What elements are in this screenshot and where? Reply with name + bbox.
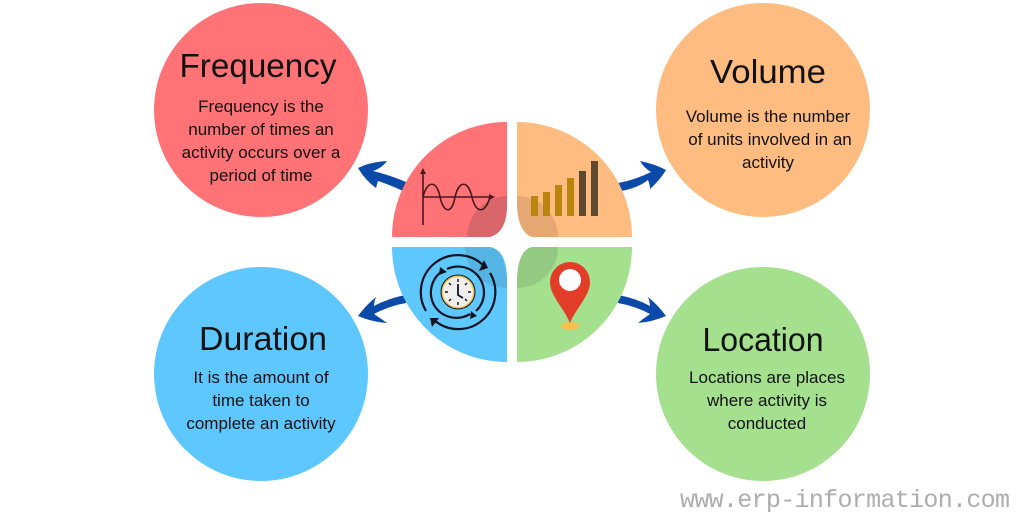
text: duration description: complete an activity — [186, 414, 336, 433]
panel: duration circle — [154, 267, 368, 481]
text: frequency description: period of time — [210, 166, 312, 185]
text: duration description — [186, 368, 336, 433]
text: volume description: of units involved in an — [688, 130, 852, 149]
panel: orange quarter with bars icon — [517, 122, 632, 237]
arrow: to volume — [618, 161, 666, 191]
text: frequency description: Frequency is the — [198, 97, 324, 116]
icon: sine wave chart — [420, 168, 495, 225]
text: location description: Locations are places — [689, 368, 845, 387]
text: volume description: Volume is the number — [686, 107, 851, 126]
heading: volume: Volume — [710, 53, 826, 90]
text: duration description: It is the amount of — [193, 368, 329, 387]
text: volume description — [686, 107, 852, 172]
icon: map pin — [550, 262, 590, 330]
icon: bar chart — [531, 161, 598, 216]
arrow: to duration — [358, 295, 406, 323]
text: frequency description — [182, 97, 341, 185]
panel: red quarter with wave icon — [392, 122, 507, 237]
panel: frequency circle — [154, 3, 368, 217]
text: location description — [689, 368, 845, 433]
text: location description: conducted — [728, 414, 806, 433]
text: location description: where activity is — [706, 391, 827, 410]
text: frequency description: activity occurs over a — [182, 143, 341, 162]
panel: green quarter with pin icon — [517, 247, 632, 362]
text: frequency description: number of times an — [188, 120, 334, 139]
arrow: to frequency — [358, 161, 406, 191]
text: duration description: time taken to — [212, 391, 310, 410]
panel: blue quarter with clock icon — [392, 247, 507, 362]
icon: clock with circular arrows — [421, 255, 495, 329]
panel: volume circle — [656, 3, 870, 217]
arrow: to location — [618, 295, 666, 323]
panel: location circle — [656, 267, 870, 481]
text: volume description: activity — [742, 153, 794, 172]
heading: location: Location — [702, 321, 824, 358]
heading: frequency: Frequency — [180, 47, 337, 84]
heading: duration: Duration — [199, 320, 327, 357]
